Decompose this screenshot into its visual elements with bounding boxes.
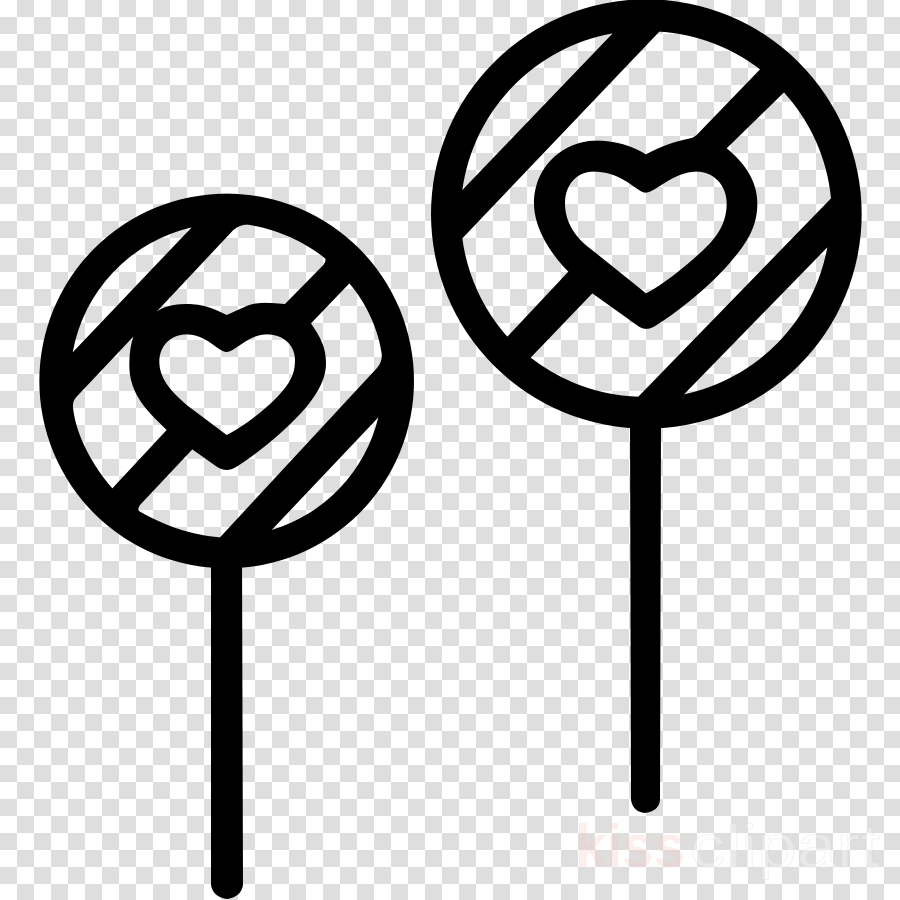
small lollipop candy with stripes and heart: [39, 194, 414, 568]
watermark: kissclipart: [575, 813, 880, 880]
watermark word: clipart: clipart: [690, 813, 880, 880]
icon: small lollipop, lower left: [39, 194, 414, 899]
small lollipop stick: [211, 555, 243, 899]
large lollipop candy with stripes and heart: [431, 0, 862, 429]
icon: large lollipop, upper right: [431, 0, 862, 813]
watermark word: kiss: kiss: [575, 813, 685, 880]
large lollipop stick: [630, 420, 661, 813]
